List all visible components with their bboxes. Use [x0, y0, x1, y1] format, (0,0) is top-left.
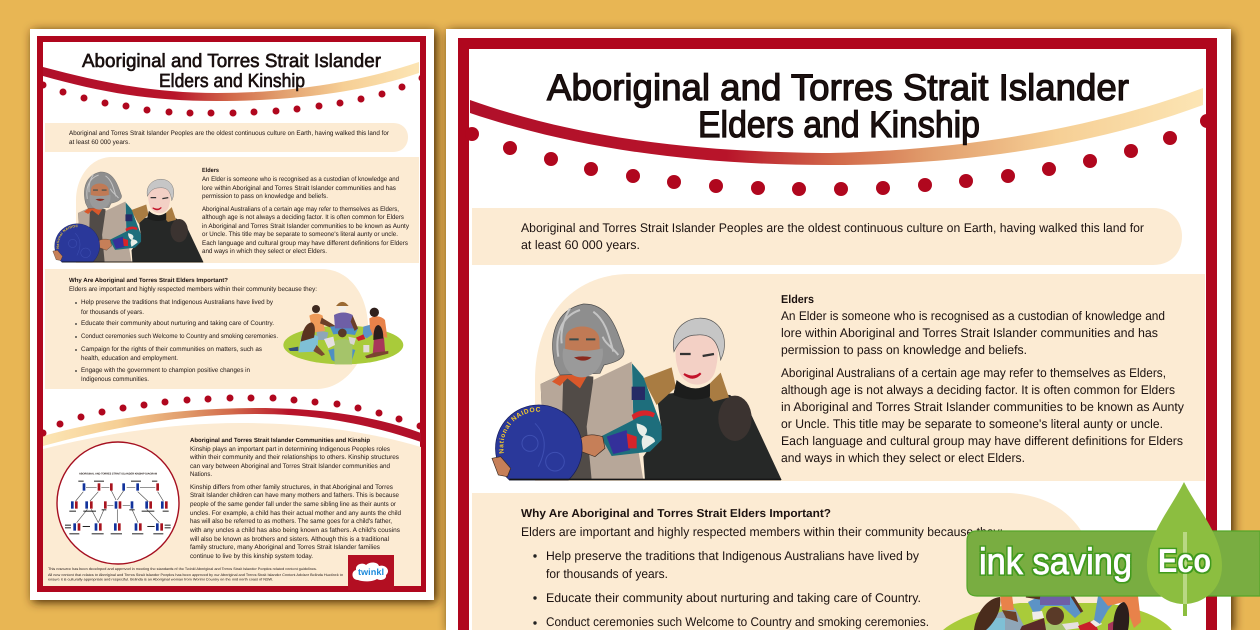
small elders text: or Uncle. This title may be separate to someone's literal aunty or uncle.: [202, 231, 398, 238]
twinkl logo: [348, 555, 394, 590]
small elders text: Aboriginal Australians of a certain age may refer to themselves as Elders,: [202, 206, 399, 213]
left girl: [990, 608, 1026, 630]
person in green: [324, 329, 356, 364]
NAIDOC disc: [495, 405, 582, 480]
small kinship text: Kinship differs from other family structures, in that Aboriginal and Torres: [190, 484, 394, 491]
small intro text: [69, 130, 390, 146]
small title: [82, 51, 382, 92]
small elders panel: [76, 157, 419, 263]
small title: Elders and Kinship: [159, 71, 305, 92]
small footer notes: [48, 567, 343, 582]
title swoosh: [470, 88, 1203, 165]
small why text: Indigenous communities.: [81, 376, 149, 383]
ink saving text: ink saving: [979, 541, 1132, 582]
why text: Help preserve the traditions that Indigenous Australians have lived by: [546, 549, 920, 563]
why text: Conduct ceremonies such Welcome to Country and smoking ceremonies.: [546, 615, 929, 629]
small why text: Elders are important and highly respected members within their community because they:: [69, 286, 317, 293]
front person: [1043, 622, 1067, 630]
kinship diagram circle: ABORIGINAL AND TORRES STRAIT ISLANDER KINSHIP DIAGRAM: [79, 472, 157, 476]
elders illustration: man with NAIDOC disc and woman with fur collar: [492, 304, 782, 480]
top dots: [465, 114, 1214, 196]
panel: large poster detail: [440, 23, 1242, 630]
ink saving eco banner: [967, 482, 1260, 616]
elders text: although age is not always a deciding factor. It is often common for Elders: [781, 383, 1175, 397]
man in hat: [330, 302, 358, 335]
right person: [1078, 620, 1098, 630]
small kinship text: within their community and their relationships to others. Kinship structures: [189, 454, 400, 461]
small why text: [69, 277, 317, 383]
panel: small poster preview: [30, 29, 434, 600]
title: [547, 67, 1129, 145]
girl in orange: [309, 305, 335, 340]
small elders text: although age is not always a deciding factor. It is often common for Elders: [202, 214, 405, 221]
title: Elders and Kinship: [698, 104, 980, 145]
elders text: [781, 294, 1185, 465]
small kinship text: Aboriginal and Torres Strait Islander Communities and Kinship: [190, 437, 370, 444]
intro text: at least 60 000 years.: [521, 238, 640, 252]
small lower dots: [40, 394, 424, 436]
small why text: Why Are Aboriginal and Torres Strait Elders Important?: [69, 277, 228, 284]
small lower arch swoosh: [43, 408, 421, 446]
group illustration (cropped by the frame): [943, 595, 1172, 630]
small kinship text: has will also be referred to as mothers. The same goes for a child's father,: [190, 518, 392, 525]
small elders text: permission to pass on knowledge and beliefs.: [202, 193, 328, 200]
twinkl logo: twinkl: [358, 567, 384, 577]
small footer notes: All new content that relates to Aboriginal and Torres Strait Islander Peoples has been approved by our Aboriginal and Torres Strait Islander Content Advisor Belinda Huetinck to: [48, 573, 343, 577]
small kinship panel: [43, 423, 421, 586]
small kinship text: Kinship plays an important part in determining Indigenous Peoples roles: [190, 446, 391, 453]
small elders text: and ways in which they select or elect Elders.: [202, 248, 327, 255]
man's jeans and shirt: [1028, 596, 1082, 618]
elders text: lore within Aboriginal and Torres Strait Islander communities and has: [781, 326, 1158, 340]
man vest and shirt: [541, 373, 593, 480]
small title swoosh: [43, 62, 419, 101]
small intro text: at least 60 000 years.: [69, 139, 130, 146]
intro text: [521, 221, 1144, 252]
small kinship text: [189, 437, 401, 560]
why text: Why Are Aboriginal and Torres Strait Elders Important?: [521, 508, 831, 520]
large poster sheet: [446, 29, 1231, 630]
icon: leaf: [1147, 482, 1222, 616]
small intro bar: [45, 123, 408, 152]
girl in maroon: [363, 325, 388, 358]
small why text: Educate their community about nurturing and taking care of Country.: [81, 320, 274, 327]
why text: Educate their community about nurturing and taking care of Country.: [546, 591, 921, 605]
intro bar: [472, 208, 1182, 265]
large poster red border: [458, 38, 1217, 630]
elders text: in Aboriginal and Torres Strait Islander communities to be known as Aunty: [781, 400, 1185, 414]
small kinship text: can vary between Aboriginal and Torres Strait Islander communities and: [190, 463, 390, 470]
small elders text: in Aboriginal and Torres Strait Islander communities to be known as Aunty: [202, 223, 410, 230]
title: Aboriginal and Torres Strait Islander: [547, 67, 1129, 108]
small elders text: Each language and cultural group may have different definitions for Elders: [202, 240, 409, 247]
small kinship text: Nations.: [190, 471, 212, 478]
small kinship text: will also be known as brothers and sisters. Although this is a traditional: [189, 536, 390, 543]
small footer notes: This resource has been developed and approved in meeting the standards of the Twinkl Aboriginal and Torres Strait Islander Peoples related content guidelines.: [48, 567, 317, 571]
small elders illustration: [53, 172, 203, 262]
small elders text: Elders: [202, 167, 220, 174]
Eco label: Eco: [1158, 542, 1211, 579]
elders text: Elders: [781, 294, 814, 306]
why text: for thousands of years.: [546, 567, 668, 581]
small footer notes: ensure it is culturally appropriate and respectful. Belinda is an Aboriginal woman from Worimi Country on the mid north coast of NSW.: [48, 578, 273, 582]
why text: [521, 508, 1003, 629]
hand: [578, 435, 605, 457]
small why text: health, education and employment.: [81, 355, 178, 362]
elders illustration: man with NAIDOC disc and woman with fur collar: National NAIDOC: [498, 407, 540, 454]
small kinship text: uncles. For example, a child has their actual mother and any aunts the child: [190, 510, 401, 517]
small poster red border: [40, 39, 423, 589]
kinship diagram circle: [57, 442, 179, 564]
elders text: Aboriginal Australians of a certain age may refer to themselves as Elders,: [781, 366, 1166, 380]
woman: [643, 392, 782, 480]
small why panel: [45, 269, 368, 389]
small why text: Help preserve the traditions that Indigenous Australians have lived by: [81, 299, 274, 306]
small kinship text: people of the same gender fall under the same sibling line as their aunts or: [190, 501, 397, 508]
person on right: [356, 308, 387, 341]
banner bar: [967, 531, 1260, 596]
small elders text: [202, 167, 410, 255]
elders panel: [535, 274, 1205, 481]
ground line: [509, 479, 781, 480]
elders text: Each language and cultural group may have different definitions for Elders: [781, 434, 1183, 448]
small why text: for thousands of years.: [81, 309, 144, 316]
girl with long hair: [288, 322, 325, 356]
small elders text: lore within Aboriginal and Torres Strait Islander communities and has: [202, 185, 397, 192]
intro text: Aboriginal and Torres Strait Islander Peoples are the oldest continuous culture on Earth, having walked this land for: [521, 221, 1144, 235]
small kinship text: Strait Islander children can have many mothers and fathers. This is because: [190, 492, 399, 499]
small kinship text: with any uncles a child has also being known as fathers. A child's cousins: [189, 527, 401, 534]
man head: [553, 304, 624, 375]
elders text: An Elder is someone who is recognised as a custodian of knowledge and: [781, 309, 1165, 323]
why text: Elders are important and highly respected members within their community because they:: [521, 525, 1003, 539]
small why text: Engage with the government to champion positive changes in: [81, 367, 250, 374]
elders text: and ways in which they select or elect Elders.: [781, 451, 1025, 465]
small kinship text: family structure, many Aboriginal and Torres Strait Islander families: [190, 544, 381, 551]
small top dots: [40, 74, 426, 116]
small intro text: Aboriginal and Torres Strait Islander Peoples are the oldest continuous culture on Earth, having walked this land for: [69, 130, 390, 137]
small title: Aboriginal and Torres Strait Islander: [82, 51, 382, 72]
small why text: Campaign for the rights of their communities on matters, such as: [81, 346, 263, 353]
small kinship text: continue to live by this kinship system today.: [190, 553, 313, 560]
elders text: permission to pass on knowledge and beliefs.: [781, 343, 1027, 357]
small poster sheet: [30, 29, 434, 600]
elders text: or Uncle. This title may be separate to someone's literal aunty or uncle.: [781, 417, 1163, 431]
small group illustration: [283, 302, 403, 364]
why panel: [472, 493, 1110, 630]
small elders text: An Elder is someone who is recognised as a custodian of knowledge and: [202, 176, 399, 183]
sleeve: [601, 363, 662, 456]
small why text: Conduct ceremonies such Welcome to Country and smoking ceremonies.: [81, 333, 278, 340]
